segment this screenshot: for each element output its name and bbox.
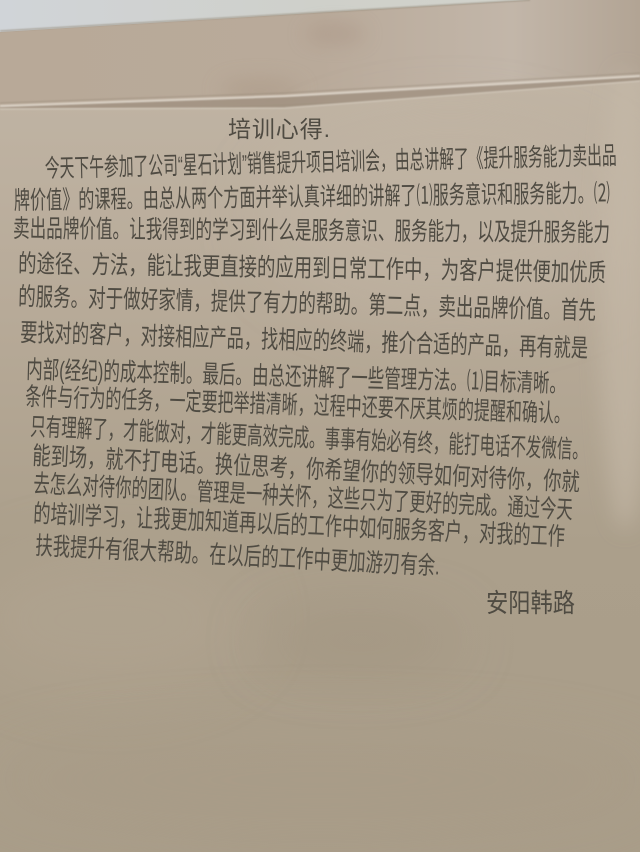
upper folded flap: [0, 0, 640, 100]
title: 培训心得.: [228, 116, 330, 142]
body line 13: 扶我提升有很大帮助。在以后的工作中更加游刃有余.: [35, 532, 441, 580]
handwritten text: [13, 116, 617, 618]
fold crease: [0, 0, 640, 109]
signature: 安阳韩路: [486, 588, 575, 618]
background surface: [0, 0, 528, 32]
